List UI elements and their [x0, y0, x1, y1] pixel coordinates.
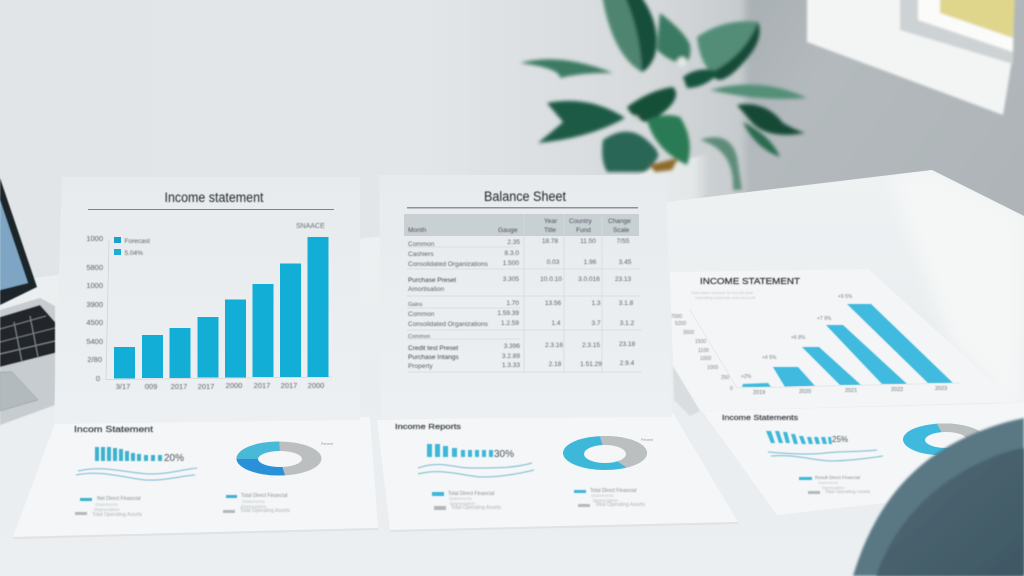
plant — [520, 0, 807, 203]
laptop base — [0, 298, 55, 425]
chart year labels: 2020 — [799, 389, 811, 395]
legend: Depreciation — [822, 485, 844, 490]
y axis labels: 3900 — [86, 300, 103, 309]
y axis labels — [86, 234, 103, 383]
x axis labels: 2017 — [254, 381, 270, 390]
legend — [114, 237, 150, 257]
legend: 5.04% — [124, 250, 143, 257]
table rows: 13.56 — [545, 300, 562, 307]
wave lines — [768, 450, 883, 461]
chart value labels: 7000 — [671, 314, 682, 320]
table rows: 2.35 — [507, 239, 520, 246]
table: Change — [608, 218, 631, 225]
table rows: 2.3.15 — [582, 342, 600, 349]
chart value labels: 3500 — [683, 330, 694, 336]
chart value labels: 1000 — [700, 356, 711, 362]
title rule — [88, 209, 334, 210]
table rows: 11.50 — [580, 238, 596, 245]
sheet subtitle — [691, 290, 756, 300]
chart value labels: 1100 — [698, 348, 709, 354]
sheet title: Balance Sheet — [484, 189, 566, 204]
legend left: Statements — [449, 496, 473, 501]
table rows: Property — [408, 363, 433, 370]
mini chart percentage: 30% — [494, 449, 514, 460]
chart value labels: +2% — [741, 374, 752, 380]
plant pot — [640, 153, 712, 203]
panel: lower middle report sheet — [377, 413, 738, 532]
table rows: Common — [408, 334, 430, 340]
table rows: 3.396 — [504, 343, 520, 350]
donut chart — [563, 436, 647, 470]
table rows: Consolidated Organizations — [408, 261, 489, 268]
x axis labels: 2017 — [198, 382, 214, 391]
table rows: 3.45 — [619, 259, 632, 266]
bars — [114, 237, 328, 378]
chart year labels: 2019 — [753, 390, 765, 396]
y axis labels: 1000 — [86, 281, 103, 290]
chart value labels: 1500 — [695, 339, 706, 345]
x axis labels: 009 — [145, 382, 157, 391]
chart value labels: 1000 — [707, 365, 718, 371]
laptop keyboard — [0, 305, 55, 367]
wave lines — [76, 468, 197, 480]
table rows: 1.500 — [503, 260, 519, 267]
table rows: 3.1.8 — [619, 300, 634, 307]
donut callout: Percent — [641, 438, 653, 442]
chart value labels: 0 — [730, 386, 733, 392]
donut callout: Percent — [321, 442, 333, 446]
sheet title: Income statement — [164, 190, 264, 205]
axes — [106, 240, 332, 380]
table rows: Purchase Preset — [408, 277, 456, 284]
chart year labels: 2022 — [891, 387, 903, 393]
sheet subtitle: Operating expenses and net profit — [695, 295, 756, 300]
table rows: Purchase Intangs — [408, 354, 459, 361]
mini bar chart — [427, 444, 493, 457]
window — [807, 0, 1015, 115]
laptop trackpad — [0, 372, 38, 411]
table rows: Credit test Preset — [408, 345, 458, 352]
legend: Statements — [818, 480, 838, 485]
x axis labels: 2000 — [226, 381, 242, 390]
y axis labels: 0 — [96, 374, 100, 383]
x axis labels — [116, 381, 324, 391]
legend right: Depreciation — [241, 504, 267, 509]
legend right: Depreciation — [593, 498, 619, 503]
table — [404, 214, 642, 372]
panel: balance sheet table — [379, 175, 672, 419]
legend left: Total Operating Assets — [451, 505, 502, 511]
legend left — [432, 491, 502, 511]
table rows — [408, 238, 636, 370]
table rows: 1.4 — [551, 320, 561, 327]
legend right — [223, 493, 291, 514]
table rows: 18.78 — [542, 238, 559, 245]
bar chart — [86, 234, 332, 391]
background wall — [0, 0, 1024, 300]
chart value labels: +9 5% — [838, 294, 853, 300]
chart year labels — [753, 386, 947, 396]
wave lines — [418, 463, 534, 477]
y axis labels: 4500 — [86, 318, 103, 327]
sheet heading: INCOME STATEMENT — [700, 277, 800, 286]
chair back — [853, 418, 1024, 576]
chart value labels: +7 9% — [817, 316, 832, 322]
table: Month — [408, 227, 426, 234]
table rows: 1.96 — [584, 259, 597, 266]
table: Fund — [576, 227, 591, 234]
table rows: 10.0.10 — [540, 276, 562, 283]
table rows: 1.3.33 — [502, 362, 520, 369]
table rows: 3.305 — [503, 276, 519, 283]
table rows: Cashiers — [408, 251, 434, 258]
x axis labels: 3/17 — [116, 382, 130, 391]
table rows: 3.1.2 — [620, 320, 635, 327]
table rows: 23.13 — [615, 276, 632, 283]
table: Year — [544, 218, 558, 225]
table rows: 1.70 — [506, 300, 519, 307]
donut chart — [236, 442, 322, 476]
panel: lower right report sheet — [702, 403, 1024, 515]
legend right: Total Operating Assets — [240, 508, 291, 514]
mini bar chart — [95, 447, 162, 461]
sheet heading: Income Statements — [722, 415, 799, 422]
table: Scale — [613, 227, 630, 234]
donut chart — [903, 424, 980, 456]
table rows: 0.03 — [547, 259, 560, 266]
legend right: Statements — [591, 493, 615, 498]
legend left: Statements — [95, 502, 119, 507]
laptop lid and screen — [0, 178, 37, 305]
table rows: 3.0.016 — [578, 276, 600, 283]
legend — [799, 475, 871, 494]
table rows: 3.7 — [591, 320, 601, 327]
table rows: 1.59.39 — [497, 310, 519, 317]
table: Title — [544, 227, 556, 234]
legend right: Total Direct Financial — [590, 488, 636, 494]
table rows: 2.3.16 — [545, 342, 563, 349]
chart value labels — [671, 294, 853, 392]
table rows: 3.2.89 — [502, 353, 520, 360]
sheet heading: Income Reports — [395, 422, 461, 431]
y axis labels: 2/80 — [87, 355, 102, 364]
table rows: 1.2.59 — [501, 320, 519, 327]
chart year labels: 2023 — [935, 386, 947, 392]
legend right — [574, 488, 646, 508]
table header — [404, 214, 639, 236]
chart axis — [690, 310, 960, 388]
table top — [12, 170, 1024, 300]
y axis labels: 5400 — [86, 337, 103, 346]
table rows: 23.18 — [619, 341, 636, 348]
plant leaves — [520, 0, 807, 190]
laptop — [0, 178, 55, 425]
legend left: Depreciation — [450, 501, 476, 506]
table rows: Consolidated Organizations — [408, 321, 489, 328]
table rows: 1.3 — [591, 300, 601, 307]
legend right: Statements — [242, 499, 266, 504]
x axis labels: 2017 — [171, 382, 187, 391]
panel: income statement chart sheet — [54, 177, 360, 424]
legend left: Depreciation — [94, 507, 120, 512]
panel: right sloped income statement sheet — [670, 269, 1015, 416]
legend left: Total Direct Financial — [448, 491, 494, 497]
y axis labels: 5800 — [86, 263, 103, 272]
mini chart percentage: 25% — [832, 435, 848, 444]
chart value labels: 250 — [721, 375, 730, 381]
legend: Result Direct Financial — [815, 475, 860, 480]
chart value labels: +4 5% — [762, 355, 777, 361]
legend right: Total Operating Assets — [595, 502, 646, 508]
table: Country — [569, 218, 593, 225]
legend: Forecast — [124, 238, 150, 245]
chart caption: SNAACE — [296, 223, 325, 230]
slanted bar chart — [742, 304, 953, 387]
panel: lower left report sheet — [13, 417, 378, 539]
table: Gauge — [498, 227, 518, 234]
table rows: 8.3.0 — [505, 250, 519, 257]
table rows: Common — [408, 311, 435, 318]
legend right: Total Direct Financial — [241, 493, 287, 499]
legend: Total Operating Assets — [825, 489, 871, 494]
chart year labels: 2021 — [845, 388, 857, 394]
title rule — [407, 207, 638, 208]
mini chart percentage: 20% — [164, 453, 184, 464]
x axis labels: 2000 — [308, 381, 324, 390]
sheet heading: Incom Statement — [74, 425, 154, 434]
legend left: Total Operating Assets — [92, 512, 143, 518]
table rows: 1.51.29 — [580, 361, 602, 368]
legend left: Net Direct Financial — [97, 496, 141, 502]
table rows: 2.18 — [549, 361, 562, 368]
table rows: Common — [408, 241, 435, 248]
table rows: Amortisation — [408, 286, 445, 293]
chart value labels: 5200 — [675, 321, 686, 327]
table rows: Gains — [408, 302, 423, 308]
x axis labels: 2017 — [281, 381, 297, 390]
y axis labels: 1000 — [86, 234, 103, 243]
table rows: 2.9.4 — [620, 360, 635, 367]
legend left — [75, 496, 143, 518]
chart value labels: +6 8% — [791, 335, 806, 341]
table grid — [407, 214, 642, 372]
sheet subtitle: Total sales revenue for the full year — [691, 290, 754, 295]
mini bar chart — [766, 431, 832, 444]
table rows: 7/55 — [617, 238, 630, 245]
